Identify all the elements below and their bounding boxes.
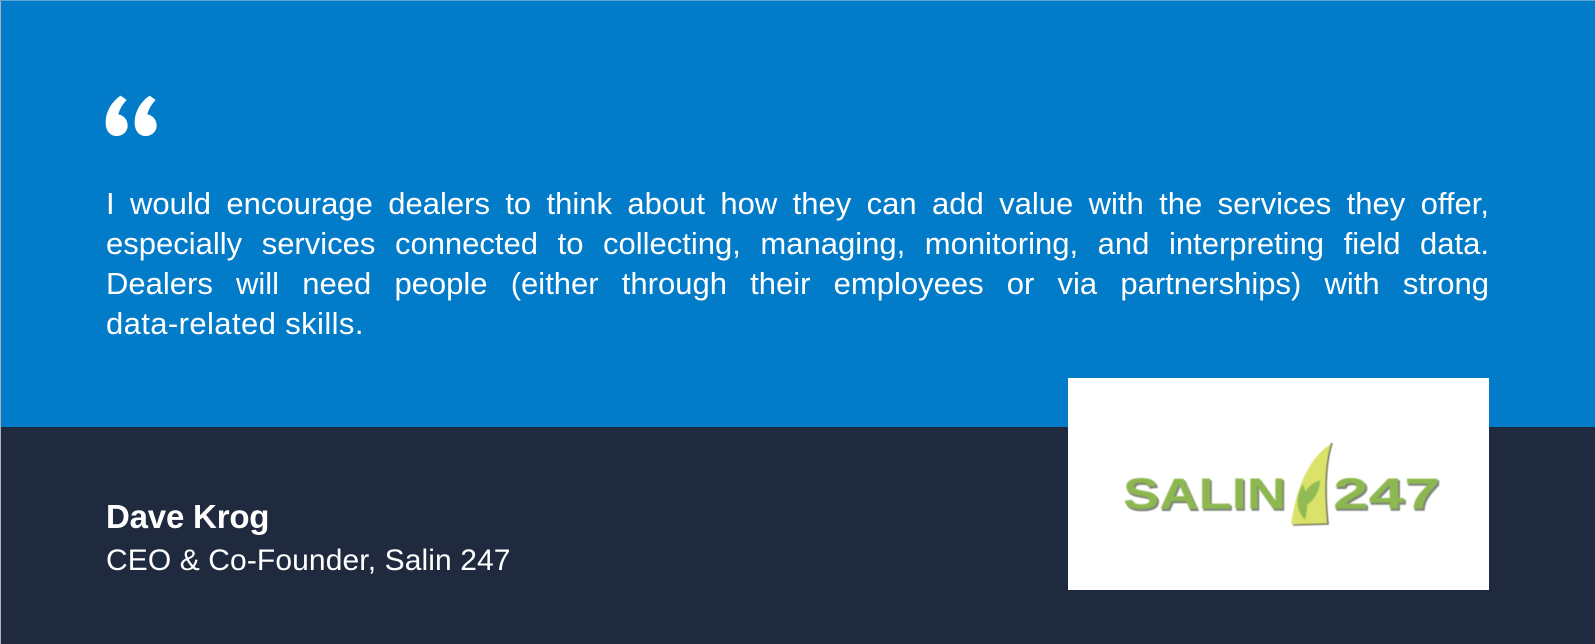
panel: logo card (1068, 378, 1489, 590)
text block: quote: especially services connected to collecting, managing, monitoring, and interpreting field data. (106, 226, 1489, 261)
panel: blue quote background (0, 0, 1595, 427)
text block: quote: I would encourage dealers to think about how they can add value with the services they offer, (106, 186, 1489, 221)
heading: name: Dave Krog (106, 498, 269, 535)
icon: quotation mark (106, 96, 157, 136)
logo wordmark shadow: SALIN (1124, 472, 1288, 520)
logo leaf (1291, 443, 1332, 525)
text: role: CEO & Co-Founder, Salin 247 (106, 544, 511, 577)
text block: quote: data-related skills. (106, 306, 364, 341)
logo: Salin 247 (1123, 442, 1442, 526)
text block: quote (106, 186, 1489, 341)
logo wordmark shadow (1124, 472, 1442, 520)
text block: quote: Dealers will need people (either through their employees or via partnerships) with strong (106, 266, 1489, 301)
logo wordmark: 247 (1333, 470, 1440, 518)
logo wordmark (1123, 470, 1440, 518)
logo wordmark shadow: 247 (1334, 472, 1442, 520)
text block: attribution (106, 498, 511, 577)
logo wordmark: SALIN (1123, 470, 1286, 518)
